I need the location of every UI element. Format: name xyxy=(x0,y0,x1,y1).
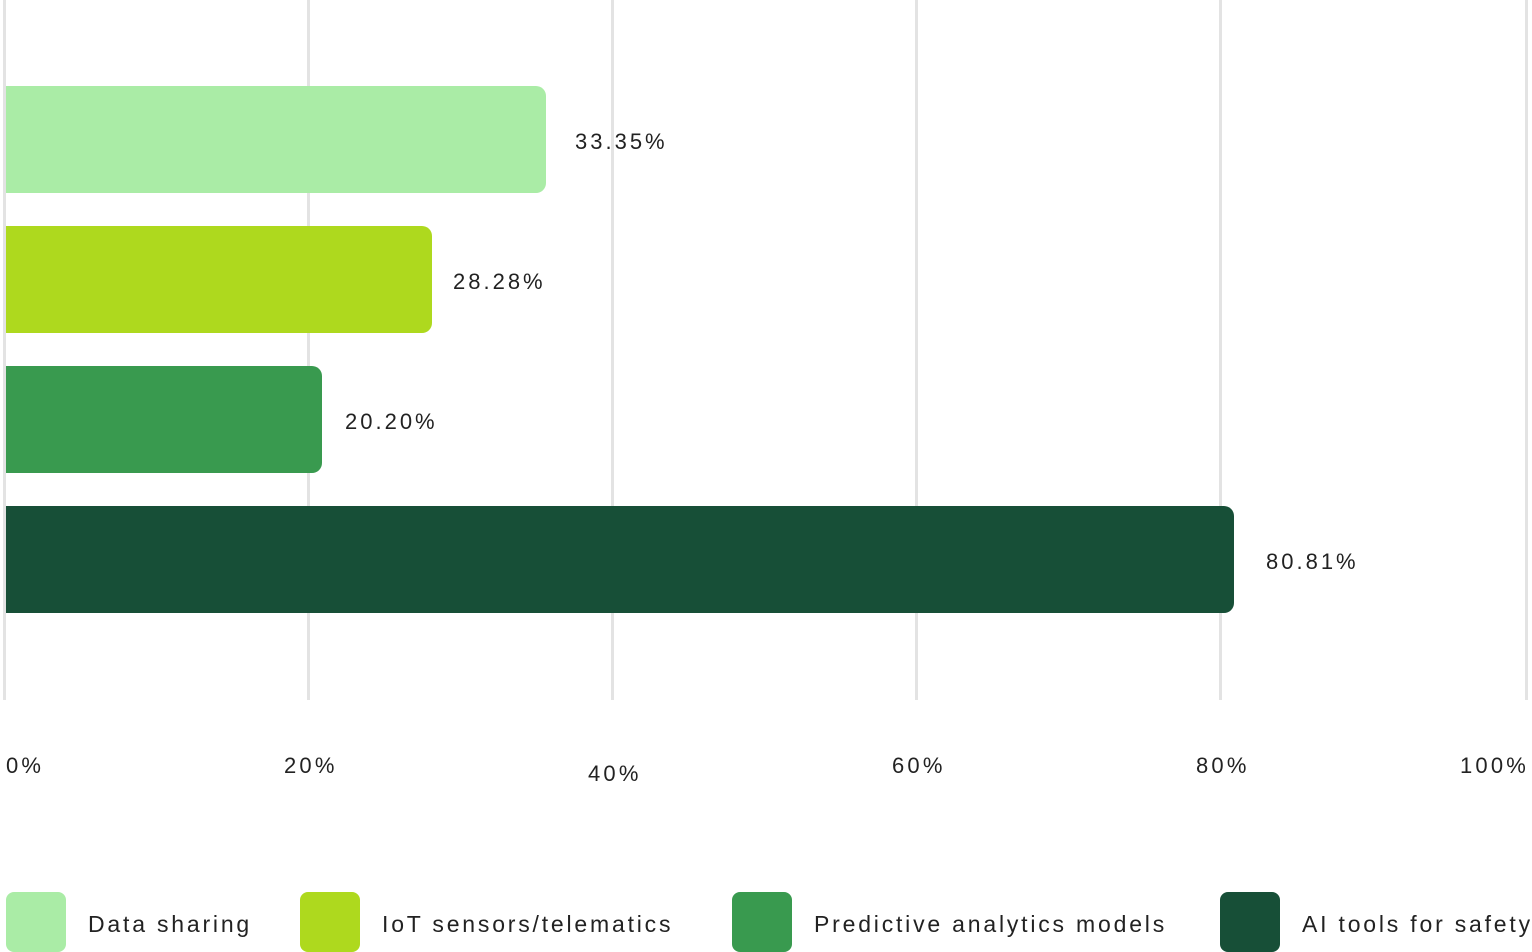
value label 80.81%: 80.81% xyxy=(1266,549,1359,574)
legend xyxy=(6,892,1532,952)
x axis labels: 80% xyxy=(1196,753,1250,778)
legend item: AI tools for safety: AI tools for safety xyxy=(1302,911,1532,937)
bar: Data sharing 33.35% xyxy=(6,86,546,193)
x axis labels: 20% xyxy=(284,753,338,778)
legend item: Data sharing: Data sharing xyxy=(88,911,252,937)
legend item: AI tools for safety xyxy=(1220,892,1532,952)
legend item: Predictive analytics models: Predictive analytics models xyxy=(814,911,1167,937)
legend item: Data sharing xyxy=(6,892,252,952)
value label 28.28%: 28.28% xyxy=(453,269,546,294)
x axis labels: 0% xyxy=(6,753,44,778)
x axis labels xyxy=(6,753,1529,786)
x axis labels: 60% xyxy=(892,753,946,778)
legend item: IoT sensors/telematics xyxy=(300,892,673,952)
legend item: Predictive analytics models xyxy=(732,892,1167,952)
legend item: IoT sensors/telematics: IoT sensors/telematics xyxy=(382,911,673,937)
bar: AI tools 80.81% xyxy=(6,506,1234,613)
x axis labels: 40% xyxy=(588,761,642,786)
value label 33.35%: 33.35% xyxy=(575,129,668,154)
x axis labels: 100% xyxy=(1460,753,1529,778)
value label 20.20%: 20.20% xyxy=(345,409,438,434)
bar chart xyxy=(6,86,1359,613)
bar: Predictive analytics 20.20% xyxy=(6,366,322,473)
bar: IoT sensors 28.28% xyxy=(6,226,432,333)
